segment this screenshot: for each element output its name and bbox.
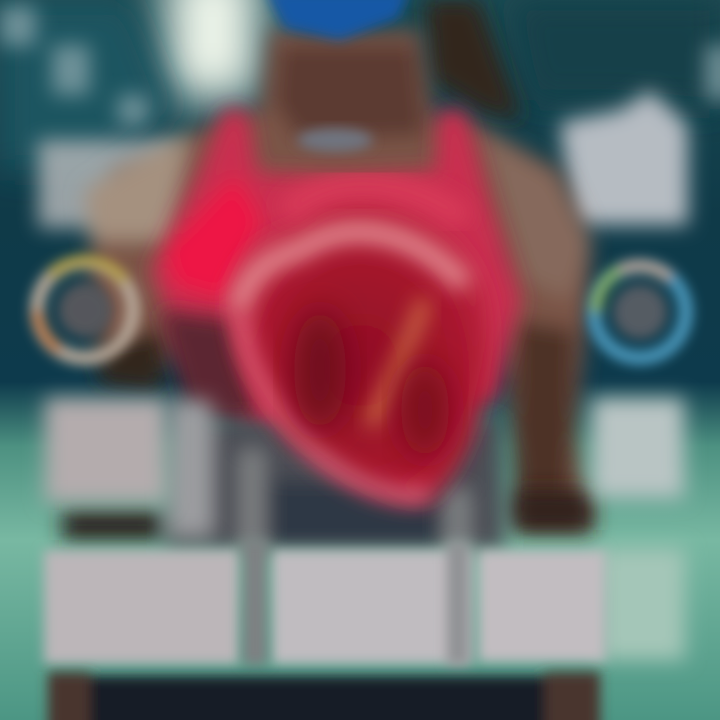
torso lower darkness bbox=[160, 310, 260, 420]
panel: middle right bbox=[592, 398, 684, 498]
background blurred top-corner panels bbox=[0, 6, 720, 125]
athlete: arms and torso bbox=[85, 30, 592, 530]
cap: blue bbox=[266, 0, 410, 40]
shorts and lower body bbox=[62, 400, 593, 550]
heart aorta arch bbox=[285, 184, 465, 220]
bottom dark band bbox=[48, 672, 600, 720]
panel: bottom right bbox=[478, 550, 606, 662]
panel: bottom centre bbox=[272, 550, 472, 664]
heart vessel orange bbox=[370, 300, 425, 425]
background trees: dark left and right bbox=[0, 0, 720, 170]
heart upper highlight bbox=[238, 232, 465, 310]
donut chart: left bbox=[37, 261, 133, 358]
panel: bottom far right bbox=[600, 548, 685, 660]
panel: upper right bbox=[560, 90, 688, 225]
panel: middle left bbox=[45, 398, 167, 503]
panel: bottom left bbox=[44, 550, 239, 664]
background glow: sky at top centre bbox=[165, 0, 260, 100]
heart dark chamber right bbox=[401, 362, 449, 458]
tank top: pink bbox=[150, 108, 522, 430]
heart body bbox=[232, 201, 490, 501]
hair bbox=[425, 0, 522, 120]
heart dark chamber bbox=[294, 310, 346, 430]
necklace bbox=[297, 128, 373, 152]
heart bbox=[232, 184, 490, 501]
donut chart: right bbox=[594, 266, 686, 358]
leg strips over bottom panels bbox=[243, 540, 469, 665]
panel: upper left bbox=[38, 140, 178, 228]
heart outer light rim bbox=[240, 310, 430, 496]
